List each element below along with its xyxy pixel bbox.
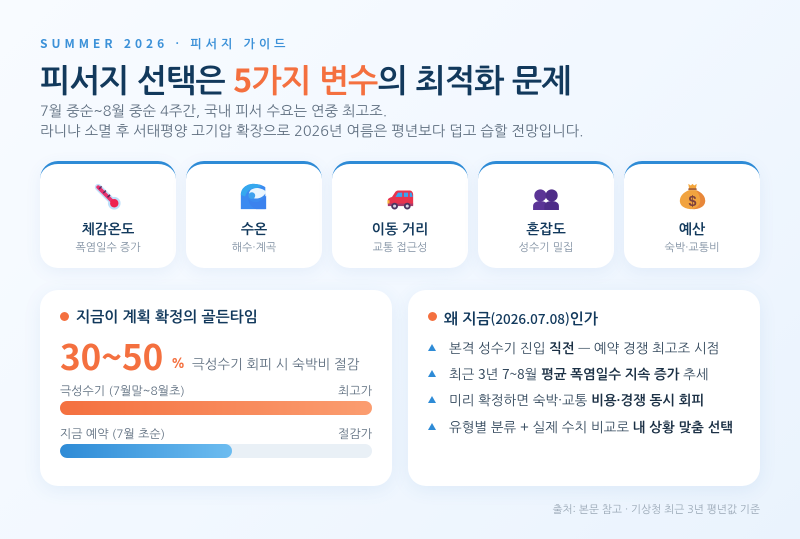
panel: why now [408,290,760,486]
icon: money bag: $ [689,194,697,210]
icon: thermometer [94,184,121,210]
source note: 출처: 본문 참고 · 기상청 최근 3년 평년값 기준 [552,504,760,515]
big stat: 30~50%: 30~50 [60,330,163,381]
bar: peak price [60,401,372,415]
card caption: 숙박·교통비 [665,242,719,253]
card caption: 해수·계곡 [232,242,276,253]
list item 1: 본격 성수기 진입 직전 — 예약 경쟁 최고조 시점 [449,341,719,356]
subtitle: 7월 중순~8월 중순 4주간, 국내 피서 수요는 연중 최고조. [40,105,387,119]
card title: 예산 [679,223,705,237]
bar label right: peak: 최고가 [338,385,372,397]
card caption: 성수기 밀집 [519,242,573,253]
eyebrow label: SUMMER 2026 · 피서지 가이드 [40,35,289,52]
bullet dot [428,312,437,321]
card title: 체감온도 [82,223,134,237]
panel heading: 지금이 계획 확정의 골든타임 [76,310,258,325]
bar label left: now: 지금 예약 (7월 초순) [60,428,165,440]
list item 4: 유형별 분류 + 실제 수치 비교로 내 상황 맞춤 선택 [449,420,733,435]
icon: money bag [680,184,706,210]
subtitle: 라니냐 소멸 후 서태평양 고기압 확장으로 2026년 여름은 평년보다 덥고 습할 전망입니다. [40,125,584,139]
icon: two people silhouettes [533,189,559,210]
card title: 이동 거리 [372,223,428,237]
card: 체감온도 [40,161,176,268]
card title: 수온 [241,223,267,237]
bar label left: peak: 극성수기 (7월말~8월초) [60,385,185,397]
panel: golden time [40,290,392,486]
percent sign: % [171,357,185,370]
subtitle [40,104,584,139]
card: 예산 [624,161,760,268]
panel heading: 왜 지금(2026.07.08)인가 [444,308,598,328]
bullet dot [60,312,69,321]
card: 이동 거리 [332,161,468,268]
bar: booking now [60,444,372,458]
card caption: 폭염일수 증가 [75,242,141,253]
icon: wave [240,184,266,210]
title: 피서지 선택은 5가지 변수의 최적화 문제 [40,56,571,102]
card: 수온 [186,161,322,268]
list item 3: 미리 확정하면 숙박·교통 비용·경쟁 동시 회피 [449,393,704,408]
stat description: 극성수기 회피 시 숙박비 절감 [192,357,359,371]
card title: 혼잡도 [526,223,566,237]
bar label right: now: 절감가 [338,428,372,440]
list item 2: 최근 3년 7~8월 평균 폭염일수 지속 증가 추세 [449,363,709,383]
card: 혼잡도 [478,161,614,268]
icon: car [387,190,414,210]
card caption: 교통 접근성 [373,242,427,253]
